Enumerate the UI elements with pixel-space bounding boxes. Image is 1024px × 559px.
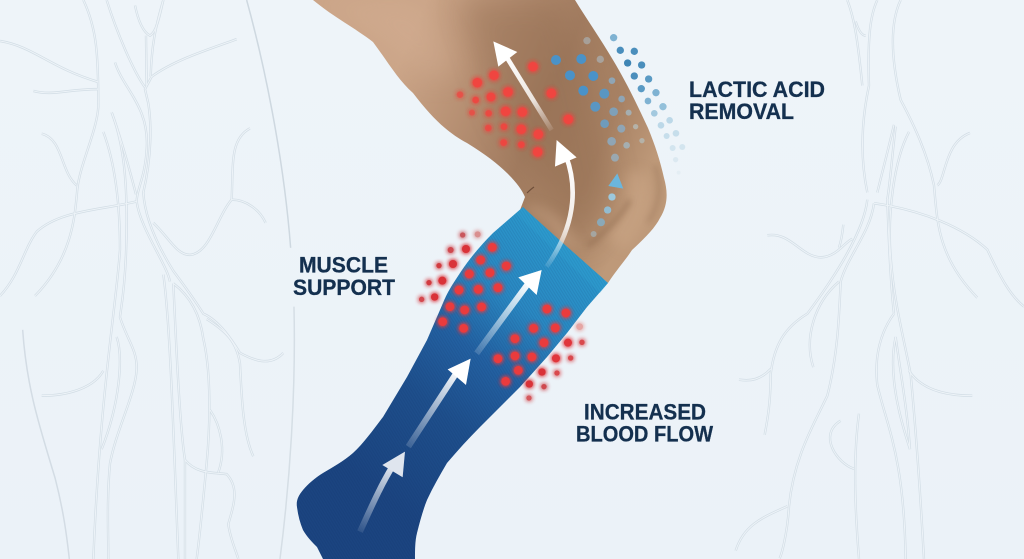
label: lactic acid removal: REMOVAL [689, 99, 794, 124]
upper calf dot cluster: muscle support [419, 231, 511, 333]
outer blue dots beyond the leg [610, 34, 685, 175]
label: increased blood flow: BLOOD FLOW [576, 422, 714, 447]
label: lactic acid removal [689, 77, 825, 124]
inner blue dots on thigh [551, 37, 645, 162]
arrow: upper thigh [493, 41, 552, 130]
label: muscle support [293, 253, 395, 300]
arrow: upper calf [477, 270, 542, 353]
arrow: ankle [360, 452, 405, 532]
arrow: mid calf [408, 359, 471, 447]
leg: bare thigh and knee [313, 0, 667, 283]
label: increased blood flow [576, 399, 714, 447]
label: muscle support: MUSCLE [299, 253, 388, 278]
label: lactic acid removal: LACTIC ACID [689, 77, 825, 102]
red dots on calf [419, 231, 585, 401]
label: increased blood flow: INCREASED [584, 399, 706, 424]
label: muscle support: SUPPORT [293, 275, 395, 300]
left vein illustration [0, 0, 294, 559]
compression sock [297, 207, 608, 559]
red dots on thigh [457, 62, 573, 157]
right vein illustration [736, 0, 1024, 559]
blue rising arrowhead and dots on knee [591, 173, 623, 237]
blue dots: lactic acid removal [551, 34, 685, 237]
arrow: curved over knee [547, 140, 577, 267]
lower calf dot cluster: increased blood flow [494, 305, 585, 401]
